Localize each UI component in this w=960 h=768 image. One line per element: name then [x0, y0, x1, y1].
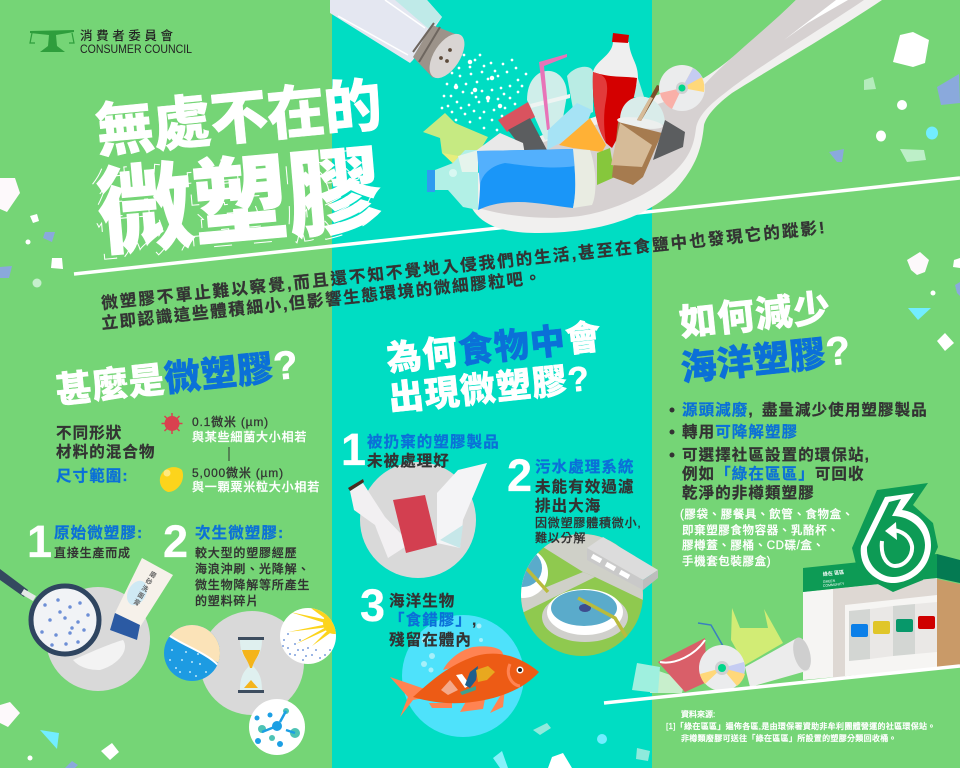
icon: red cup — [498, 102, 535, 132]
text: sources: 非樽類廢膠可送往「綠在區區」所設置的塑膠分類回收桶。 — [681, 733, 897, 743]
icon: water bottle — [427, 150, 478, 210]
store sign text: GREEN — [823, 579, 836, 584]
tube label: 磨砂洗面膏 — [132, 569, 159, 608]
illustration: recyclable items — [632, 608, 814, 693]
icon: coffee cup and kraft box — [611, 85, 686, 185]
icon: corn kernel — [160, 467, 183, 492]
text: secondary microplastics: 次生微塑膠: — [195, 523, 284, 542]
icon: clear cups behind — [527, 54, 645, 140]
text: wastewater systems: 難以分解 — [535, 530, 586, 545]
icon: bacteria — [162, 413, 182, 434]
text: wastewater systems: 未能有效過濾 — [535, 477, 635, 496]
heading: why food contains microplastics: 出現微塑膠? — [387, 359, 592, 419]
heading: why food contains microplastics: 為何食物中會 — [385, 317, 604, 379]
logo text: Chinese: 消費者委員會 — [80, 28, 177, 43]
text: discarded plastics: 被扔棄的塑膠製品 — [367, 432, 500, 451]
text: primary microplastics: 原始微塑膠: — [54, 524, 143, 542]
icon: crumpled white plastic — [477, 133, 525, 155]
text: marine life: 殘留在體內 — [389, 630, 472, 649]
logo: Consumer Council — [30, 28, 193, 56]
text: mixture description: 尺寸範圍: — [56, 466, 129, 485]
list: reduction tips: 乾淨的非樽類塑膠 — [682, 483, 815, 502]
text: secondary microplastics — [195, 523, 310, 608]
icon: plastic bag in spoon — [423, 113, 488, 170]
intro text: 立即認識這些體積細小,但影響生態環境的微細膠粒吧。 — [100, 267, 542, 333]
store sign text — [822, 569, 845, 588]
text: wastewater systems: 污水處理系統 — [535, 457, 635, 476]
number 1: 1 — [27, 516, 52, 567]
text: mixture description — [56, 424, 156, 485]
text: sources: [1]「綠在區區」遍佈各區,是由環保署資助非牟利團體營運的社區環保站。 — [666, 721, 936, 731]
text: secondary microplastics: 海浪沖刷、光降解、 — [195, 561, 310, 576]
text: size 0.1 micron: 0.1微米 (µm) — [192, 414, 269, 429]
icon: recycling number 6 logo — [852, 483, 938, 592]
text: size 5000 micron — [192, 465, 320, 494]
divider line: top — [74, 178, 960, 274]
intro text: 微塑膠不單止難以察覺,而且還不知不覺地入侵我們的生活,甚至在食鹽中也發現它的蹤影! — [100, 217, 825, 313]
icon: falling salt grains — [442, 55, 526, 130]
icon: red bottle — [593, 33, 638, 148]
icon: CD on spoon — [659, 65, 705, 111]
list: reduction tips: 可選擇社區設置的環保站, — [682, 445, 870, 464]
text: secondary microplastics: 微生物降解等所產生 — [195, 577, 310, 592]
range connector — [228, 447, 230, 461]
text: wastewater systems: 因微塑膠體積微小, — [535, 515, 642, 530]
illustration: wastewater treatment plant — [521, 534, 658, 656]
illustration: secondary microplastics — [164, 608, 336, 755]
number 1: 1 — [341, 424, 366, 475]
number 2: 2 — [507, 450, 532, 501]
text: accepted plastics list: 即棄塑膠食物容器、乳酪杯、 — [682, 523, 839, 537]
icon: blue toothpaste tube — [477, 149, 596, 210]
background: teal centre panel — [332, 0, 652, 768]
store sign text: 綠在 區區 — [822, 569, 844, 578]
panel: why food contains microplastics — [341, 317, 660, 737]
heading: how to reduce marine plastics: 如何減少 — [678, 287, 833, 344]
divider line: bottom right — [604, 666, 960, 703]
text: size 0.1 micron — [192, 414, 307, 444]
text: size 5000 micron: 5,000微米 (µm) — [192, 465, 284, 480]
spoon — [465, 0, 882, 233]
title line 2: outlined offset: 微塑膠 — [87, 141, 382, 272]
text: accepted plastics list: (膠袋、膠餐具、飲管、食物盒、 — [680, 507, 854, 521]
icon: light-blue box — [547, 103, 592, 150]
heading: how to reduce marine plastics — [678, 287, 853, 390]
icon: grey bag — [508, 118, 547, 155]
list: reduction tips: 轉用可降解塑膠 — [682, 422, 798, 441]
list: reduction tips: 源頭減廢, 盡量減少使用塑膠製品 — [682, 400, 928, 419]
title line 1: 無處不在的 — [93, 73, 385, 165]
text: mixture description: 材料的混合物 — [56, 442, 156, 461]
text: accepted plastics list: 手機套包裝膠盒) — [682, 554, 771, 568]
illustration: fish eating plastic — [390, 615, 539, 737]
text: sources: 資料來源: — [681, 709, 715, 719]
illustration: primary microplastics — [0, 558, 173, 691]
number 2: 2 — [163, 516, 188, 567]
text: primary microplastics — [54, 524, 143, 560]
text: size 0.1 micron: 與某些細菌大小相若 — [192, 429, 307, 444]
icon: orange cup — [559, 118, 606, 152]
heading: why food contains microplastics — [385, 317, 604, 419]
logo text: English: CONSUMER COUNCIL — [80, 44, 193, 56]
list: reduction tips — [670, 400, 928, 502]
text: marine life: 「食錯膠」, — [389, 610, 477, 629]
text: accepted plastics list — [680, 507, 854, 568]
text: secondary microplastics: 較大型的塑膠經歷 — [195, 545, 297, 560]
panel: how to reduce marine plastics — [604, 287, 960, 743]
icon: scales — [30, 30, 74, 52]
text: discarded plastics: 未被處理好 — [367, 452, 450, 470]
icon: green cup — [597, 148, 615, 185]
text: wastewater systems: 排出大海 — [535, 497, 601, 515]
icon: salt shaker — [330, 0, 472, 84]
number 3: 3 — [360, 580, 385, 631]
list: reduction tips: 例如「綠在區區」可回收 — [682, 464, 865, 483]
illustration: discarded plastic products — [348, 462, 487, 578]
heading: how to reduce marine plastics: 海洋塑膠? — [678, 328, 853, 390]
text: marine life: 海洋生物 — [389, 592, 455, 610]
title line 2: 微塑膠 — [94, 137, 387, 268]
text: marine life — [389, 592, 477, 649]
text: secondary microplastics: 的塑料碎片 — [195, 593, 259, 608]
text: size 5000 micron: 與一顆粟米粒大小相若 — [192, 479, 320, 494]
icon: black bag — [653, 120, 685, 160]
heading: what are microplastics: 甚麼是微塑膠? — [53, 343, 301, 412]
text: mixture description: 不同形狀 — [56, 424, 122, 442]
illustration: recycling store — [803, 554, 960, 680]
store sign text: COMMUNITY — [823, 582, 845, 588]
text: discarded plastics — [367, 432, 500, 470]
text: accepted plastics list: 膠樽蓋、膠桶、CD碟/盒、 — [682, 538, 825, 552]
text: sources — [666, 709, 936, 743]
panel: what are microplastics — [0, 343, 345, 755]
text: wastewater systems — [535, 457, 642, 545]
text: primary microplastics: 直接生產而成 — [54, 545, 131, 560]
